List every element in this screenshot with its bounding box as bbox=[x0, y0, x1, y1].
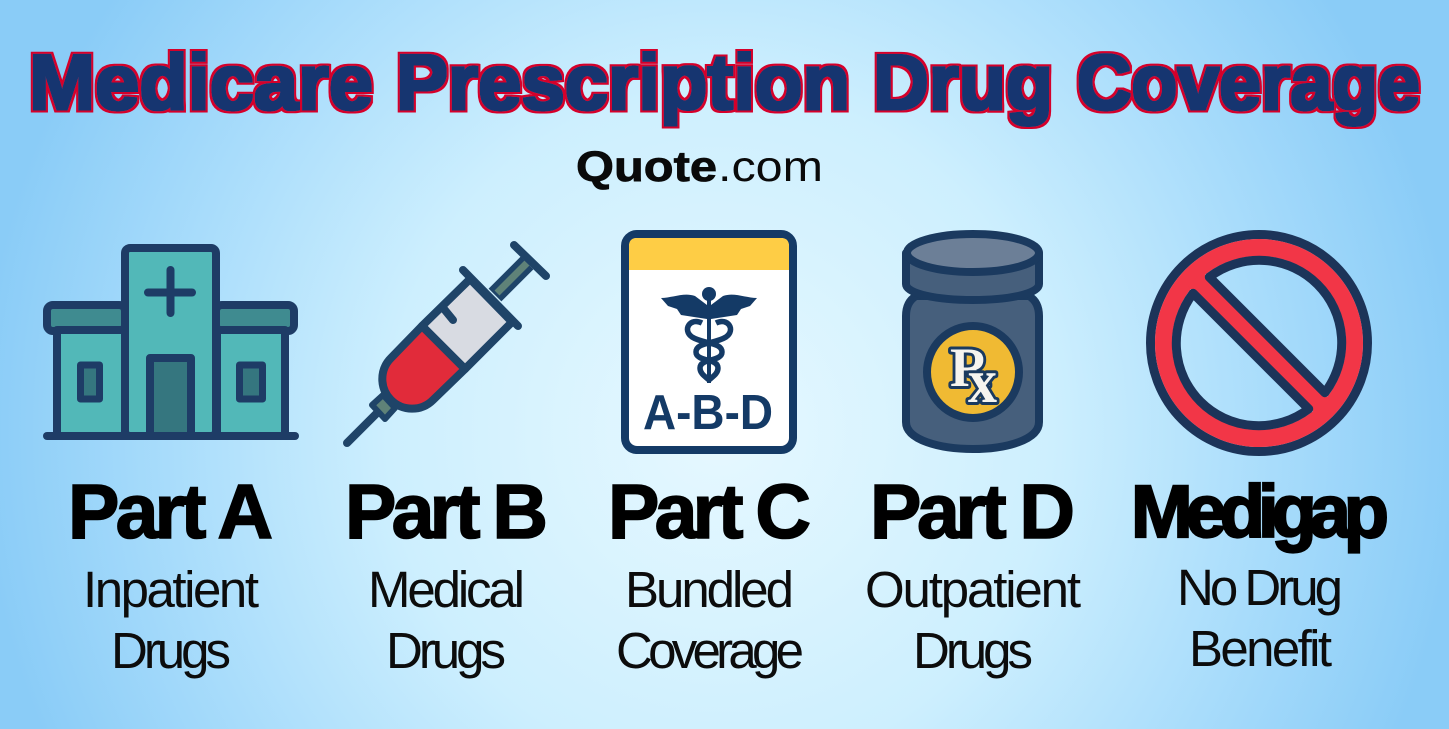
column: Part D: Drugs bbox=[913, 622, 1033, 679]
Rx symbol: x bbox=[968, 348, 997, 416]
logo: Quote.com: .com bbox=[718, 143, 823, 191]
right wing bbox=[217, 330, 285, 436]
icon: prohibited sign bbox=[1150, 234, 1368, 452]
description: No Drug bbox=[1177, 559, 1343, 616]
left wing bbox=[57, 330, 125, 436]
right roof bbox=[216, 305, 294, 331]
description: Bundled bbox=[625, 561, 794, 618]
heading: Part D bbox=[870, 469, 1075, 555]
plunger rod bbox=[495, 263, 527, 295]
title: Drug bbox=[873, 38, 1053, 126]
column: Part B: Drugs bbox=[386, 622, 506, 679]
barrel liquid bbox=[382, 326, 465, 409]
title: Prescription bbox=[396, 38, 850, 126]
caduceus bbox=[661, 287, 757, 383]
upper inner segment bbox=[1209, 260, 1342, 393]
left roof bbox=[47, 305, 125, 331]
notch bbox=[444, 309, 453, 320]
right window bbox=[240, 365, 262, 399]
description: Outpatient bbox=[865, 561, 1081, 618]
bottle body bbox=[906, 296, 1039, 449]
column: Medigap: Benefit bbox=[1189, 620, 1332, 677]
logo: Quote.com: Quote bbox=[576, 143, 717, 191]
column: Part C bbox=[608, 469, 811, 679]
column: Medigap bbox=[1131, 470, 1389, 677]
central tower bbox=[125, 248, 216, 436]
column: Part B bbox=[345, 469, 548, 679]
bottle lid side bbox=[906, 253, 1039, 300]
hub bbox=[372, 395, 395, 419]
red slash bbox=[1195, 279, 1323, 407]
Rx symbol: R bbox=[950, 337, 990, 399]
column: Part C: Coverage bbox=[616, 622, 804, 679]
Rx badge bbox=[927, 326, 1019, 418]
lower inner segment bbox=[1176, 293, 1309, 426]
outer ring bbox=[1150, 234, 1368, 452]
description: Medical bbox=[368, 561, 525, 618]
flange bbox=[463, 270, 518, 326]
cross bbox=[148, 270, 192, 313]
title: Medicare bbox=[29, 38, 373, 126]
heading: Medigap bbox=[1131, 470, 1389, 553]
base line bbox=[47, 432, 295, 440]
door bbox=[150, 358, 191, 436]
red ring bbox=[1164, 248, 1354, 438]
needle bbox=[347, 412, 378, 443]
left window bbox=[80, 365, 100, 399]
icon: plan card bbox=[625, 234, 793, 450]
card body bbox=[625, 234, 793, 450]
icon: prescription bottle bbox=[906, 234, 1039, 449]
bottle lid top bbox=[907, 234, 1039, 272]
title: Coverage bbox=[1077, 38, 1420, 126]
barrel glass bbox=[422, 279, 512, 369]
column: Part A bbox=[68, 469, 273, 679]
heading: Part A bbox=[68, 469, 273, 555]
yellow header bbox=[629, 238, 789, 270]
column: Part A: Drugs bbox=[111, 622, 231, 679]
A-B-D label: A-B-D bbox=[643, 386, 773, 440]
heading: Part B bbox=[345, 469, 548, 555]
heading: Part C bbox=[608, 469, 811, 555]
column: Part D bbox=[865, 469, 1081, 679]
plunger head bbox=[514, 245, 546, 276]
Rx symbol bbox=[950, 337, 997, 416]
icon: hospital bbox=[47, 248, 295, 436]
description: Inpatient bbox=[83, 561, 259, 618]
icon: syringe bbox=[347, 245, 546, 443]
